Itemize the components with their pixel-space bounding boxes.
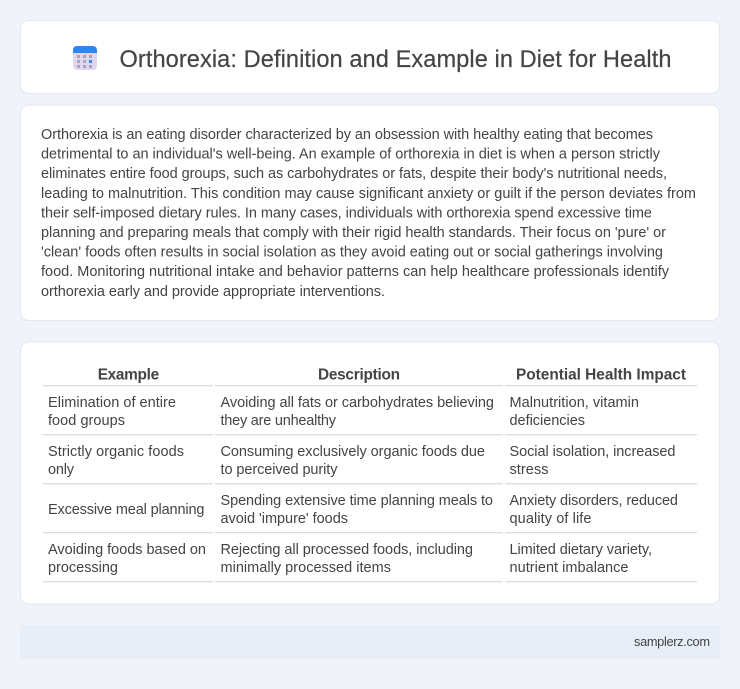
table row: excessive meal planning: Anxiety disorders, reduced [510, 493, 678, 509]
panel: title card [20, 20, 720, 94]
text block: paragraph: 'clean' foods often results in social isolation as they avoid eating out or social gatherings involving [41, 245, 663, 261]
table header: Description [318, 366, 400, 384]
table row: strictly organic foods [48, 444, 676, 478]
table row: avoiding processed foods: nutrient imbalance [510, 560, 628, 576]
table row: strictly organic foods: Social isolation, increased [510, 444, 676, 460]
table header [98, 366, 686, 384]
table row: excessive meal planning: Spending extensive time planning meals to [220, 493, 493, 509]
text block: paragraph: their self-imposed dietary rules. In many cases, individuals with orthorexia spend excessive time [41, 205, 652, 221]
table row: elimination of food groups: food groups [48, 413, 125, 429]
panel: examples table [20, 342, 720, 604]
icon: calendar [73, 46, 97, 70]
table row: elimination of food groups: Avoiding all fats or carbohydrates believing [220, 395, 494, 411]
text block: paragraph: eliminates entire food groups, such as carbohydrates or fats, despite their body's nutritional needs, [41, 166, 667, 182]
text block: paragraph: food. Monitoring nutritional intake and behavior patterns can help healthcare professionals identify [41, 264, 670, 280]
table row: elimination of food groups: deficiencies [510, 413, 585, 429]
table row: avoiding processed foods [48, 542, 652, 576]
table row: strictly organic foods: Consuming exclusively organic foods due [220, 444, 485, 460]
table row: elimination of food groups [48, 395, 639, 429]
panel: definition paragraph [20, 105, 720, 320]
text block: paragraph [41, 127, 696, 300]
table row: elimination of food groups: Malnutrition, vitamin [510, 395, 639, 411]
text block: paragraph: detrimental to an individual's well-being. An example of orthorexia in diet is when a person strictly [41, 147, 661, 163]
footer [20, 625, 720, 658]
text block: paragraph: orthorexia early and provide appropriate interventions. [41, 284, 385, 300]
text block: paragraph: planning and preparing meals that comply with their rigid health standards. Their focus on 'pure' or [41, 225, 666, 241]
footer: samplerz.com [634, 634, 710, 649]
title: Orthorexia: Definition and Example in Diet for Health [120, 47, 672, 73]
table row: excessive meal planning: quality of life [510, 511, 592, 527]
table row: excessive meal planning: Excessive meal planning [48, 502, 204, 518]
table row: strictly organic foods: to perceived purity [220, 462, 338, 478]
table header: Example [98, 366, 160, 384]
table header: Potential Health Impact [516, 366, 686, 384]
table row: excessive meal planning [48, 493, 678, 527]
table row: avoiding processed foods: processing [48, 560, 118, 576]
table row: elimination of food groups: they are unhealthy [220, 413, 337, 429]
table row: avoiding processed foods: Avoiding foods based on [48, 542, 206, 558]
table row: strictly organic foods: only [48, 462, 75, 478]
table row: strictly organic foods: Strictly organic foods [48, 444, 184, 460]
text block: paragraph: Orthorexia is an eating disorder characterized by an obsession with healthy eating that becomes [41, 127, 653, 143]
table row: avoiding processed foods: minimally processed items [220, 560, 391, 576]
table row: avoiding processed foods: Rejecting all processed foods, including [220, 542, 473, 558]
table row: elimination of food groups: Elimination of entire [48, 395, 176, 411]
table row: avoiding processed foods: Limited dietary variety, [510, 542, 652, 558]
text block: paragraph: leading to malnutrition. This condition may cause significant anxiety or guilt if the person deviates from [41, 186, 696, 202]
table row: excessive meal planning: avoid 'impure' foods [220, 511, 348, 527]
table row: strictly organic foods: stress [510, 462, 548, 478]
